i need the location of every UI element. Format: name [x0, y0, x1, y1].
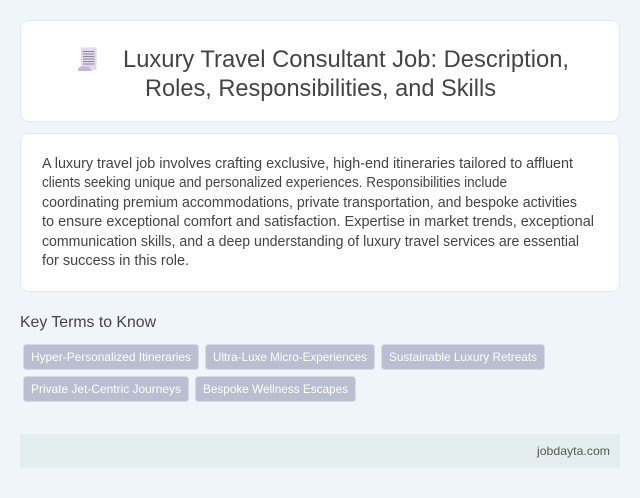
description paragraph: clients seeking unique and personalized experiences. Responsibilities include — [42, 175, 507, 191]
tag: ultra-luxe micro-experiences: Ultra-Luxe Micro-Experiences — [213, 350, 367, 364]
footer bar: jobdayta.com — [536, 444, 610, 458]
tag: bespoke wellness escapes — [196, 376, 356, 402]
footer bar — [20, 434, 620, 468]
title text — [123, 46, 569, 102]
title text: Roles, Responsibilities, and Skills — [145, 75, 496, 102]
description paragraph — [42, 156, 594, 269]
heading: key terms: Key Terms to Know — [20, 314, 156, 331]
tag: bespoke wellness escapes: Bespoke Wellness Escapes — [203, 382, 348, 396]
tag: private jet-centric journeys: Private Jet-Centric Journeys — [31, 382, 181, 396]
tag: private jet-centric journeys — [24, 376, 188, 402]
title text: Luxury Travel Consultant Job: Description, — [123, 46, 569, 73]
tag: sustainable luxury retreats: Sustainable Luxury Retreats — [389, 350, 537, 364]
tag: ultra-luxe micro-experiences — [206, 344, 374, 370]
panel: title card — [20, 20, 620, 122]
panel: description card — [20, 134, 620, 292]
tag: sustainable luxury retreats — [382, 344, 544, 370]
description paragraph: coordinating premium accommodations, private transportation, and bespoke activities — [42, 195, 577, 211]
icon: document scroll — [78, 48, 96, 71]
tag: hyper-personalized itineraries: Hyper-Personalized Itineraries — [31, 350, 191, 364]
tag: hyper-personalized itineraries — [24, 344, 198, 370]
description paragraph: for success in this role. — [42, 253, 189, 269]
description paragraph: communication skills, and a deep understanding of luxury travel services are essential — [42, 234, 579, 250]
description paragraph: A luxury travel job involves crafting exclusive, high-end itineraries tailored to affluent — [42, 156, 573, 172]
description paragraph: to ensure exceptional comfort and satisfaction. Expertise in market trends, exceptional — [42, 214, 594, 230]
